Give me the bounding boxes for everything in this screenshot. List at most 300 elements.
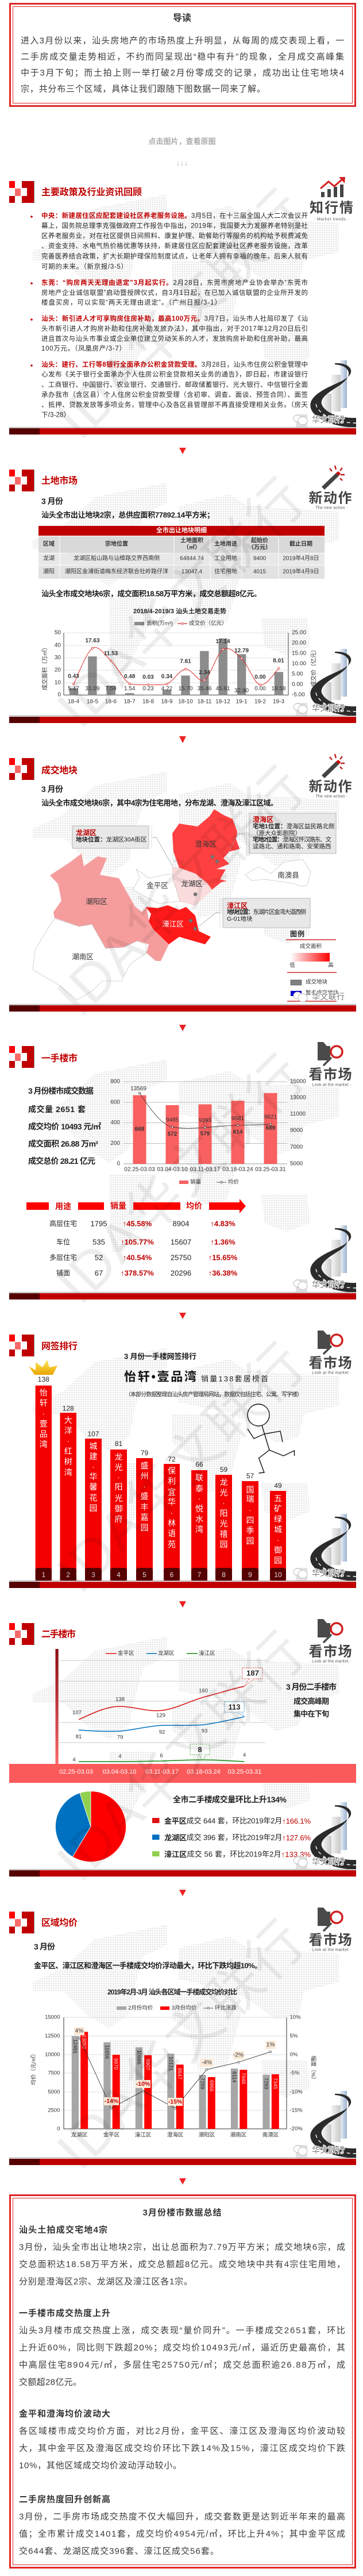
chart: district average price: -5% bbox=[289, 2070, 300, 2076]
region: 潮阳区 bbox=[50, 853, 169, 961]
chart: land trend: 0.00 bbox=[292, 682, 303, 687]
icon: wechat bubbles bbox=[294, 2145, 307, 2158]
text block: prices: 大，其中金平区及澄海区成交均价环比下跌14%及15%，濠江区成交均价下跌 bbox=[19, 2443, 345, 2453]
text: click hint: 点击图片，查看原图 bbox=[148, 137, 216, 146]
chart: weekly sales: 销量 bbox=[190, 1178, 202, 1185]
region: 潮南区 bbox=[33, 918, 146, 1000]
legend: map: 成交面积 bbox=[300, 943, 322, 949]
watermark: IDA华文联行 bbox=[45, 1910, 316, 2181]
stats: monthly numbers: 成交量 2651 套 bbox=[28, 1105, 86, 1114]
band: week axis: 03.11-03.17 bbox=[145, 1768, 179, 1775]
logo text: look at the market: · Look at the market · bbox=[309, 1083, 352, 1087]
table: land supply: 截止日期 bbox=[289, 540, 312, 547]
table: usage breakdown: 多层住宅 bbox=[49, 1253, 77, 1262]
bullet: Shantou banks: 、抵押、贷款发放等多项业务，管理中心及各区县管理部不再直接受理相关业务。（房天 bbox=[41, 401, 308, 409]
text: month: 3 月份 bbox=[34, 1942, 55, 1951]
chart: district average price: 10% bbox=[289, 2014, 301, 2021]
chart: vertical ranking bars: 保利宜华·林语苑 bbox=[168, 1466, 176, 1549]
legend: map: 暂未成交地块 bbox=[306, 990, 339, 997]
chart: land trend: 5.00 bbox=[292, 671, 303, 677]
chart: weekly second-hand sales: 4 bbox=[72, 1756, 76, 1763]
text: sold plots summary: 汕头全市成交地块6宗，其中4宗为住宅用地，分布龙湖、澄海及濠江区域。 bbox=[41, 799, 278, 807]
chart: district average price: 2500 bbox=[48, 2107, 60, 2114]
table: land supply: 13047.4 bbox=[181, 569, 203, 575]
logo: market trends bbox=[310, 177, 353, 222]
chart: weekly sales: 579 bbox=[200, 1131, 210, 1137]
chart: vertical ranking bars: 6 bbox=[170, 1571, 174, 1579]
text block: intro: 进入3月份以来，汕头房地产的市场热度上升明显，从每周的成交表现上看，一 bbox=[21, 36, 344, 46]
table: land supply: 工业用地 bbox=[214, 554, 237, 562]
panel: first-hand market bbox=[9, 1042, 356, 1316]
chart: vertical ranking bars: 9 bbox=[248, 1571, 252, 1579]
chart: land trend: 4.22 bbox=[161, 686, 173, 692]
chart: weekly sales: 800 bbox=[110, 1078, 120, 1085]
region: 金平区 bbox=[133, 869, 180, 903]
chart: district average price: -15% bbox=[168, 2098, 183, 2105]
chart: weekly sales: 9821 bbox=[264, 1114, 277, 1121]
chart: land trend: 11.53 bbox=[104, 651, 118, 657]
chart: land trend: 30 bbox=[55, 655, 61, 661]
icon: folder magnifier bbox=[318, 1908, 342, 1931]
legend: map: 图 例 bbox=[290, 930, 304, 938]
text: peak note: 成交高峰期 bbox=[294, 1697, 329, 1706]
text: deal summary: 汕头全市成交地块6宗，成交面积18.58万平方米，成交总额超8亿元。 bbox=[41, 590, 261, 598]
chart: land trend bbox=[41, 630, 317, 705]
bullet: Dongguan bbox=[30, 278, 308, 306]
chart: district average price: 澄海区 bbox=[167, 2131, 184, 2138]
chart: district average price: -14% bbox=[105, 2098, 119, 2105]
callout: 8 bbox=[190, 1744, 210, 1760]
table: usage breakdown: 52 bbox=[95, 1253, 103, 1262]
chart: land trend: 40 bbox=[55, 643, 61, 648]
text block: intro: 二手房成交量走势相近，不约而同呈现出“稳中有升”的现象，全月成交高峰集 bbox=[21, 52, 344, 62]
legend: district rows: 金平区成交 644 套，环比2019年2月↑166.1% bbox=[164, 1816, 311, 1825]
arrow: table header band: 均价 bbox=[186, 1201, 202, 1210]
table: usage breakdown: ↑15.65% bbox=[208, 1253, 238, 1262]
table: land supply: 龙湖区船山路与汕樟路交界西南侧 bbox=[74, 554, 160, 562]
legend: map: 高 bbox=[328, 962, 334, 969]
chart: weekly sales: 13000 bbox=[290, 1094, 306, 1101]
bullet: Shantou talent: 进且首次与汕头市事业或企业单位建立劳动关系的人才，发放购房补助和住房补助，最高 bbox=[41, 335, 308, 343]
chart: land trend: 0.03 bbox=[142, 674, 154, 680]
callout: 濠江区 bbox=[223, 898, 310, 928]
table: usage breakdown: 8904 bbox=[173, 1220, 189, 1228]
text block: land: 汕头土拍成交宅地4宗 bbox=[19, 2224, 107, 2235]
chart: weekly second-hand sales: 4 bbox=[118, 1753, 122, 1760]
arrow: table header band: 用途 bbox=[55, 1202, 71, 1211]
band: week axis: 03.04-03.10 bbox=[103, 1768, 136, 1775]
chart: land trend: 0.00 bbox=[254, 686, 266, 692]
chart: weekly second-hand sales: 4 bbox=[243, 1752, 246, 1759]
bullet: Dongguan: 东莞：“购房两天无理由退定”3月起实行。2月28日，东莞市房地产业协会举办“东莞市 bbox=[41, 278, 308, 286]
chart: vertical ranking bars: 49 bbox=[274, 1482, 282, 1490]
footer bar bbox=[9, 427, 356, 435]
chart: district average price: -20% bbox=[289, 2125, 303, 2132]
chart: district average price: 5000 bbox=[48, 2089, 60, 2096]
chart: weekly second-hand sales: 107 bbox=[72, 1709, 82, 1716]
legend: lines bbox=[106, 1650, 215, 1656]
chart: district average price: 10986 bbox=[136, 2050, 142, 2064]
text block: first-hand: 中高层住宅8904元/㎡，多层住宅25750元/㎡；成交总面积逾26.88万㎡，成 bbox=[19, 2360, 345, 2370]
icon: magic wand bbox=[322, 754, 345, 778]
logo text: look at the market: · Look at the market · bbox=[309, 1948, 352, 1952]
table: usage breakdown: 20296 bbox=[171, 1269, 191, 1277]
text block: prices bbox=[19, 2408, 345, 2470]
text: month: 3 月份 bbox=[41, 785, 63, 794]
bullet: Shantou banks: 、工商银行、中国银行、农业银行、交通银行、邮政储蓄银行、光大银行、中信银行全面 bbox=[41, 380, 308, 389]
text block: intro: 中于3月下旬；而土拍上则一举打破2月份零成交的记录，成功出让住宅地块4 bbox=[21, 68, 344, 78]
chart: vertical ranking bars: 大洋·红树湾 bbox=[64, 1416, 72, 1477]
chart: land trend: 18-9 bbox=[161, 699, 173, 705]
chart: weekly second-hand sales: 6 bbox=[160, 1753, 163, 1759]
chart: weekly sales: 均价 bbox=[228, 1178, 240, 1185]
chart: land trend: 成交价（亿元） bbox=[310, 647, 317, 687]
chart: district average price: 5% bbox=[289, 2033, 298, 2039]
text block: prices: 10%，其他区域成交均价波动浮动较小。 bbox=[19, 2460, 181, 2470]
table: land supply: 区域 bbox=[43, 540, 55, 547]
bullet: central policy: 区养老服务业，对在社区提供日间照料、康复护理、助餐助行等服务的机构给予税费减免 bbox=[41, 232, 308, 240]
icon: header brick bbox=[9, 1335, 34, 1356]
chart: vertical ranking bars: 龙光·阳光禧园 bbox=[219, 1478, 227, 1549]
chart: vertical ranking bars: 5 bbox=[142, 1571, 146, 1579]
region: 南澳县 bbox=[245, 859, 311, 886]
chart: land trend: 18-12 bbox=[215, 699, 230, 705]
bullet: central policy bbox=[30, 212, 308, 270]
table: usage breakdown: ↑1.36% bbox=[210, 1238, 235, 1246]
text: data note: （本部分数据整理自汕头房产管理局网站，数据仅包括住宅、公寓、写字楼） bbox=[125, 1391, 303, 1398]
chart: vertical ranking bars: 81 bbox=[115, 1440, 122, 1448]
text block: first-hand: 汕头3月楼市成交热度上涨，成交表现“量价同升”。一手楼成交2651套，环比 bbox=[19, 2325, 345, 2336]
chart: district average price: 龙湖区 bbox=[71, 2131, 88, 2138]
arrow: triangle bbox=[179, 1601, 186, 1608]
watermark: IDA华文联行 bbox=[45, 756, 316, 1028]
heading: 导读: 导读 bbox=[173, 13, 191, 23]
stats: monthly numbers: 成交总价 28.21 亿元 bbox=[28, 1156, 95, 1166]
chart: land trend: 15.70 bbox=[178, 686, 193, 692]
table: usage breakdown: ↑36.38% bbox=[208, 1269, 238, 1277]
table: land supply bbox=[38, 526, 325, 579]
legend: district rows: 龙湖区成交 396 套，环比2019年2月↑127.6% bbox=[164, 1833, 311, 1841]
chart: weekly sales: 668 bbox=[135, 1126, 145, 1132]
chart: land trend: 7.59 bbox=[105, 686, 117, 692]
chart: vertical ranking bars: 1 bbox=[41, 1571, 45, 1579]
chart: weekly second-hand sales bbox=[55, 1649, 265, 1764]
bullet: Dongguan: 楼盘买房，可以实现“两天无理由退定”。（广州日报/3-1） bbox=[41, 298, 221, 306]
chart: vertical ranking bars: 2 bbox=[66, 1571, 70, 1579]
arrow: triangle bbox=[179, 1025, 186, 1031]
icon: header brick bbox=[9, 1046, 34, 1068]
heading: land market: 土地市场 bbox=[41, 475, 78, 486]
heading: district prices: 区域均价 bbox=[41, 1917, 78, 1928]
bullet: Shantou banks: 汕头：建行、工行等8银行全面承办公积金贷款受理。3月28日，汕头市住房公积金管理中 bbox=[41, 360, 308, 368]
table: usage breakdown: 车位 bbox=[56, 1237, 70, 1246]
chart: district average price: 均价（元/㎡） bbox=[30, 2051, 37, 2085]
illustration: road and buildings bbox=[310, 1225, 356, 1293]
table: usage breakdown: ↑378.57% bbox=[121, 1269, 154, 1277]
chart: district average price: 7259 bbox=[200, 2078, 206, 2089]
arrow: triangle bbox=[179, 1890, 186, 1896]
table: land supply: 潮阳区金浦街道梅东经济联合社岭路仔洋 bbox=[65, 568, 168, 575]
logo text: look at the market: · Look at the market · bbox=[309, 1371, 352, 1375]
text block: second-hand: 值；全市累计成交1401套，成交均价4954元/㎡，环比上升4%；其中金平区成 bbox=[19, 2529, 345, 2539]
chart: district average price: -10% bbox=[289, 2089, 303, 2096]
chart: land trend: 50 bbox=[55, 630, 61, 636]
map: Shantou districts: 澄海区 bbox=[195, 840, 217, 848]
legend: lines: 金平区 bbox=[118, 1650, 134, 1656]
map: Shantou districts: 南澳县 bbox=[277, 871, 299, 879]
region: 龙湖区 bbox=[172, 868, 212, 905]
icon: magic wand bbox=[322, 466, 345, 490]
chart: district average price: 6966 bbox=[208, 2080, 214, 2091]
bullet: Shantou banks bbox=[30, 360, 308, 419]
text: supply summary: 汕头全市出让地块2宗，总供应面积77892.14平方米； bbox=[41, 510, 214, 520]
stats: monthly numbers: 成交均价 10493 元/㎡ bbox=[28, 1122, 101, 1131]
heading: sold plots: 成交地块 bbox=[41, 764, 78, 776]
chart: district average price: 8647 bbox=[177, 2068, 183, 2079]
band: week axis: 03.25-03.31 bbox=[228, 1768, 261, 1775]
logo: market trends: 知行情 bbox=[310, 200, 353, 216]
table: usage breakdown: 15607 bbox=[171, 1238, 191, 1246]
text block: second-hand bbox=[19, 2494, 345, 2556]
chart: district average price: 1% bbox=[267, 2041, 275, 2048]
chart: weekly second-hand sales: 129 bbox=[156, 1713, 165, 1718]
chart: land trend: 10.00 bbox=[292, 661, 306, 667]
table: land supply: 全市出让地块明细 bbox=[156, 526, 207, 534]
callout: 濠江区: G-01地块 bbox=[227, 915, 253, 922]
chart: district average price: 潮阳区 bbox=[199, 2131, 215, 2138]
chart: land trend: 0.34 bbox=[161, 674, 173, 680]
table: land supply: 住宅用地 bbox=[214, 568, 237, 575]
icon: header brick bbox=[9, 470, 34, 491]
panel: policy section bbox=[9, 177, 356, 451]
table: land supply: 土地面积 bbox=[180, 537, 203, 544]
legend: 3月份均价 bbox=[172, 2005, 197, 2012]
legend: 成交价（亿元） bbox=[189, 620, 227, 626]
panel: district prices bbox=[9, 1908, 356, 2181]
legend: district rows bbox=[152, 1816, 311, 1859]
text: wechat watermark: 华文联行 bbox=[312, 415, 345, 424]
chart: district average price: 南澳区 bbox=[262, 2131, 279, 2138]
text block: prices: 金平和澄海均价波动大 bbox=[19, 2408, 110, 2419]
chart title: 2018/4-2019/3 汕头土地交易走势 bbox=[133, 607, 226, 615]
chart: vertical ranking bars: 79 bbox=[141, 1449, 148, 1457]
callout: 龙湖区: 龙湖区 bbox=[76, 828, 96, 837]
chart: weekly second-hand sales: 93 bbox=[202, 1728, 207, 1735]
arrow: triangle bbox=[179, 736, 186, 743]
logo text: look at the market: 看市场 bbox=[309, 1355, 352, 1371]
text block: first-hand: 交额超28亿元。 bbox=[19, 2377, 82, 2387]
chart: land trend: 19-2 bbox=[254, 699, 266, 705]
map: Shantou districts: 潮南区 bbox=[72, 952, 94, 961]
chart: vertical ranking bars: 107 bbox=[87, 1430, 99, 1438]
chart: district average price: 11656 bbox=[104, 2045, 110, 2059]
icon: wechat bubbles bbox=[294, 1279, 307, 1292]
chart: land trend: 20 bbox=[55, 667, 61, 674]
chart: land trend: 20.00 bbox=[292, 640, 306, 646]
bullet: Shantou banks: 下/3-28） bbox=[41, 412, 70, 419]
chart: district average price: 幅度（%） bbox=[310, 2056, 317, 2082]
bullet: central policy: 幕上，国务院总理李克强做政府工作报告中指出，2019年，我国要大力发展养老特别是社 bbox=[41, 222, 308, 230]
text: top project sales: 销量138套居榜首 bbox=[201, 1375, 268, 1383]
chart: weekly sales: 9000 bbox=[290, 1128, 303, 1133]
table: usage breakdown bbox=[49, 1219, 238, 1277]
chart: district average price: -10% bbox=[136, 2081, 150, 2087]
table: land supply: （万元） bbox=[248, 544, 271, 551]
chart: vertical ranking bars: 怡轩·壹品湾 bbox=[40, 1388, 48, 1449]
chart: weekly sales: 11000 bbox=[290, 1111, 306, 1117]
logo text: look at the market: 看市场 bbox=[309, 1067, 352, 1083]
chart: land trend: 18-7 bbox=[124, 699, 136, 705]
logo text: new action: · The new action · bbox=[312, 794, 348, 799]
chart: weekly sales: 03.25-03.31 bbox=[255, 1167, 286, 1172]
text block: land: 交总面积达18.58万平方米，成交总额超8亿元。成交地块中共有4宗住宅用地， bbox=[19, 2259, 345, 2269]
text block: prices: 各区域楼市成交均价方面，对比2月份，金平区、濠江区及澄海区均价波动较 bbox=[19, 2425, 345, 2436]
chart: weekly second-hand sales: 92 bbox=[159, 1729, 165, 1736]
text: wechat watermark: 华文联行 bbox=[312, 703, 345, 713]
chart: weekly sales: 200 bbox=[110, 1140, 120, 1147]
chart: land trend: 32.90 bbox=[234, 687, 249, 694]
chart: district average price: -2% bbox=[233, 2052, 244, 2059]
footer bar bbox=[9, 2158, 356, 2165]
logo text: new action: 新动作 bbox=[309, 491, 352, 506]
illustration: road and buildings bbox=[310, 1514, 356, 1581]
legend: map: 低 bbox=[289, 962, 295, 969]
chart: land trend: 8.01 bbox=[273, 658, 284, 664]
chart: district average price: -15% bbox=[289, 2107, 303, 2114]
table: land supply: 2019年4月9日 bbox=[283, 568, 319, 575]
bullet: Shantou talent: 头市新引进人才购房补助和住房补助发放办法》，其中指出，对于2017年12月20日后引 bbox=[41, 324, 308, 332]
chart: vertical ranking bars: 8 bbox=[222, 1571, 226, 1579]
text block: second-hand: 二手房热度回升创新高 bbox=[19, 2494, 110, 2505]
callout: 濠江区: 濠江区 bbox=[227, 901, 248, 910]
chart: district average price: 金平区 bbox=[103, 2131, 120, 2138]
icon: wechat bubbles bbox=[294, 1568, 307, 1581]
chart: vertical ranking bars: 10 bbox=[274, 1571, 282, 1579]
footer bar bbox=[9, 1581, 356, 1588]
chart: land trend: 12.79 bbox=[234, 648, 249, 654]
icon: folder magnifier bbox=[318, 1042, 342, 1065]
band: week axis: 03.18-03.24 bbox=[187, 1768, 221, 1775]
chart: vertical ranking bars: 57 bbox=[246, 1472, 254, 1480]
table: usage breakdown: ↑105.77% bbox=[121, 1238, 154, 1246]
chart: weekly sales: 03.11-03.17 bbox=[190, 1167, 221, 1172]
table: usage breakdown: ↑4.83% bbox=[210, 1220, 235, 1228]
callout: 澄海区: 澄海区 bbox=[253, 815, 273, 824]
chart title: 2019年2月-3月 汕头各区域一手楼成交均价对比 bbox=[107, 1987, 237, 1996]
table: land supply: 起始价 bbox=[251, 537, 268, 544]
text: wechat watermark: 华文联行 bbox=[312, 1568, 345, 1578]
band: week axis: 02.25-03.03 bbox=[59, 1768, 93, 1775]
watermark: IDA华文联行 bbox=[45, 1621, 316, 1893]
bullet: central policy: 、资金支持、水电气热价格优惠等扶持，新建居住区应配套建设社区养老服务设施，改革 bbox=[41, 242, 308, 250]
chart: land trend: 0.00 bbox=[254, 674, 266, 680]
heading: policy: 主要政策及行业资讯回顾 bbox=[41, 186, 142, 198]
table: land supply: 64844.74 bbox=[180, 555, 204, 562]
watermark: IDA华文联行 bbox=[45, 1333, 316, 1604]
chart: land trend: 19-1 bbox=[236, 699, 248, 705]
logo text: look at the market: 看市场 bbox=[309, 1932, 352, 1948]
chart: vertical ranking bars: 盛州·盛丰嘉园 bbox=[140, 1461, 148, 1532]
text: city growth: 全市二手楼成交量环比上升134% bbox=[173, 1795, 287, 1804]
chart: weekly sales: 7000 bbox=[290, 1144, 303, 1151]
chart: vertical ranking bars: 联泰·悦水湾 bbox=[195, 1473, 203, 1534]
table: land supply: 土地用途 bbox=[214, 540, 237, 547]
chart: land trend: 5.47 bbox=[68, 686, 79, 692]
chart: weekly second-hand sales: 81 bbox=[76, 1733, 82, 1740]
chart: vertical ranking bars: 五矿绿城·御园 bbox=[274, 1494, 282, 1565]
text: price summary: 金平区、濠江区和澄海区一手楼成交均价浮动最大，环比下跌均超10%。 bbox=[34, 1961, 262, 1970]
chart: land trend: 0.48 bbox=[124, 674, 136, 680]
chart: district average price bbox=[30, 2014, 317, 2138]
callout: 187: 187 bbox=[246, 1669, 259, 1677]
chart: land trend: 7.61 bbox=[180, 659, 191, 664]
text block: intro: 宗，共分布三个区域，具体让我们跟随下图数据一同来了解。 bbox=[21, 84, 265, 94]
chart: land trend: 45.61 bbox=[215, 686, 230, 692]
text: wechat watermark: 华文联行 bbox=[312, 1280, 345, 1289]
chart: district average price: 7948 bbox=[241, 2073, 246, 2084]
chart: vertical ranking bars: 66 bbox=[195, 1460, 203, 1468]
text block: intro bbox=[21, 36, 344, 94]
chart: land trend: 18-8 bbox=[142, 699, 154, 705]
chart: district average price: 0% bbox=[289, 2052, 298, 2058]
map: Shantou districts: 金平区 bbox=[146, 881, 168, 890]
footer bar bbox=[9, 716, 356, 723]
chart: weekly sales: 02.25-03.03 bbox=[124, 1167, 155, 1172]
chart: land trend: 25.00 bbox=[292, 630, 306, 636]
chart: land trend: 0 bbox=[57, 692, 61, 698]
chart: district average price: 12491 bbox=[72, 2039, 78, 2054]
heading: first-hand market: 一手楼市 bbox=[41, 1053, 78, 1063]
map: Shantou districts: 潮阳区 bbox=[86, 897, 107, 906]
map: Shantou districts bbox=[33, 809, 311, 1000]
chart: district average price: 7345 bbox=[272, 2078, 278, 2089]
icon: header brick bbox=[9, 758, 34, 780]
footer bar bbox=[9, 1869, 356, 1877]
chart: weekly sales: 13569 bbox=[130, 1086, 146, 1092]
chart: weekly sales: 9681 bbox=[231, 1116, 245, 1122]
chart: district average price: 13052 bbox=[82, 2035, 87, 2049]
illustration: road and buildings bbox=[310, 360, 356, 428]
chart: land trend: 17.63 bbox=[85, 638, 100, 644]
chart: district average price: 9907 bbox=[145, 2059, 151, 2070]
callout: 澄海区: （原大众影剧院） bbox=[253, 829, 301, 837]
panel: intro box bbox=[10, 3, 355, 106]
callout: 8: 8 bbox=[198, 1745, 202, 1754]
watermark: IDA华文联行 bbox=[45, 1044, 316, 1316]
arrow: triangle bbox=[179, 1313, 186, 1319]
chart: land trend: 35.46 bbox=[197, 686, 212, 692]
callout: 龙湖区 bbox=[72, 826, 149, 848]
icon: header brick bbox=[9, 181, 34, 203]
chart: land trend: 成交面积（万㎡） bbox=[41, 644, 48, 690]
callout: 濠江区: 地块位置：东湖片区金湾大道西侧 bbox=[227, 908, 306, 916]
chart: district average price: 8114 bbox=[231, 2071, 237, 2082]
chart: weekly sales: 689 bbox=[266, 1125, 276, 1131]
table: land supply: 9400 bbox=[253, 555, 267, 562]
legend: 面积(万m²) bbox=[146, 620, 173, 626]
table: usage breakdown: ↑40.54% bbox=[123, 1253, 152, 1262]
bullet: Shantou talent: 汕头：新引进人才可享购房住房补助，最高100万元。3月7日，汕头市人社局印发了《汕 bbox=[41, 314, 308, 322]
chart: vertical ranking bars: 128 bbox=[63, 1405, 74, 1413]
text: ranking subtitle: 3 月份一手楼网签排行 bbox=[124, 1352, 196, 1361]
region: 澄海区 bbox=[172, 809, 240, 890]
legend: map: 成交地块 bbox=[306, 978, 328, 985]
chart: weekly sales: 03.18-03.24 bbox=[222, 1167, 253, 1172]
chart: district average price: 4% bbox=[75, 2028, 83, 2035]
text block: land: 3月份，汕头全市出让地块2宗，出让总面积为7.79万平方米；成交地块6宗，成 bbox=[19, 2241, 345, 2252]
chart: district average price: 7293 bbox=[263, 2078, 269, 2089]
illustration: road and buildings bbox=[310, 2091, 356, 2158]
